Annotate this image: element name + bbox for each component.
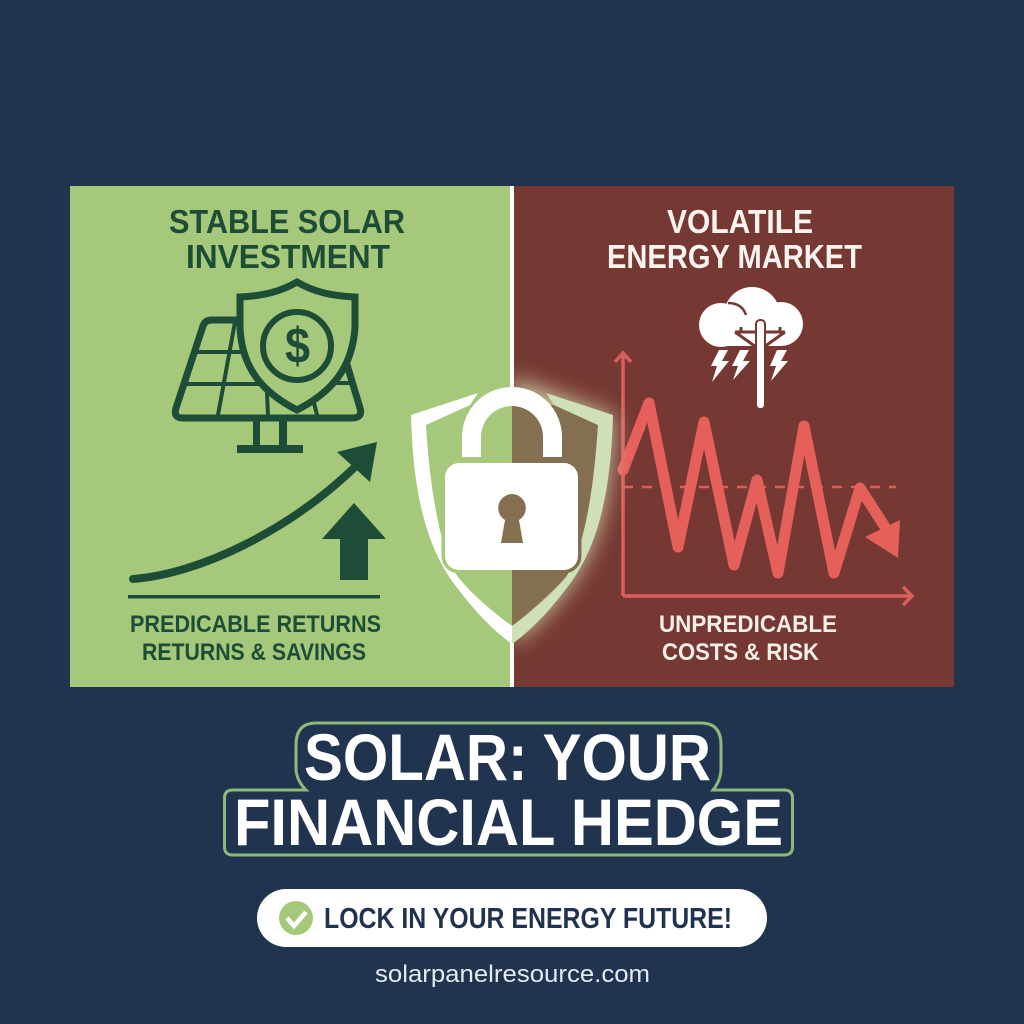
chart: volatile price line [615,353,912,605]
padlock [445,387,578,570]
label: unpredictable costs and risk: UNPREDICABLE [659,611,837,638]
label: unpredictable costs and risk: COSTS & RISK [662,639,820,666]
panel: volatile energy market [514,186,954,687]
icon: check mark [279,901,313,935]
divider [510,186,514,687]
icon: solar panel with shield [175,282,361,453]
label: predictable returns: RETURNS & SAVINGS [142,639,366,666]
icon: solar panel with shield: $ [285,318,310,374]
label: predictable returns: PREDICABLE RETURNS [130,611,381,638]
heading: volatile energy market: VOLATILE [667,203,813,240]
heading: stable solar investment: STABLE SOLAR [169,203,405,240]
panel: stable solar investment [70,186,511,687]
heading: volatile energy market: ENERGY MARKET [607,238,862,275]
label: predictable returns [130,611,381,666]
chart: rising returns arrow [128,442,386,598]
call to action pill [257,889,767,947]
website url: solarpanelresource.com [375,961,650,988]
heading: stable solar investment [169,203,405,275]
heading: volatile energy market [607,203,862,275]
heading: stable solar investment: INVESTMENT [186,238,390,275]
label: unpredictable costs and risk [659,611,837,666]
title: solar your financial hedge [224,720,792,859]
title: solar your financial hedge: SOLAR: YOUR [304,720,711,794]
title: solar your financial hedge: FINANCIAL HEDGE [234,785,783,859]
icon: shield with padlock [411,378,613,644]
icon: storm cloud and power pole [699,287,803,409]
call to action pill: LOCK IN YOUR ENERGY FUTURE! [324,903,732,935]
